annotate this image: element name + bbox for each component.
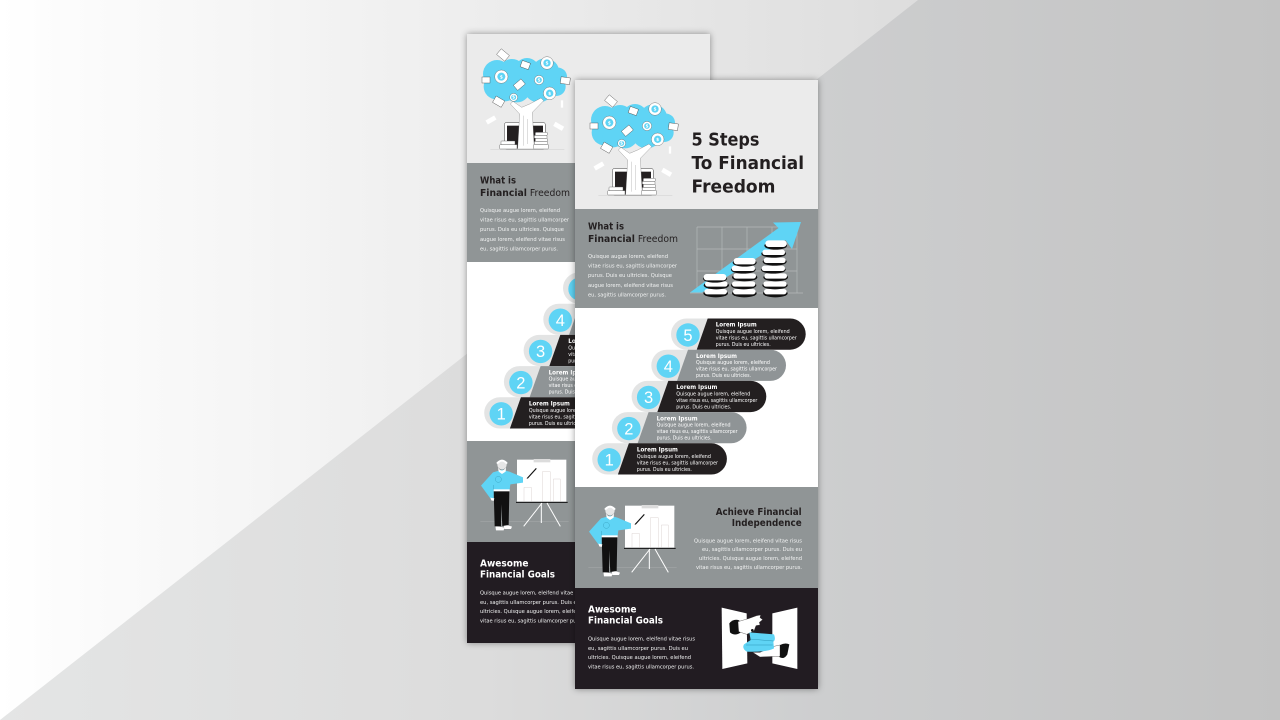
step 1: vitae risus eu, sagittis ullamcorper (637, 460, 719, 466)
icon: hands exchanging money through doors (722, 608, 797, 669)
step 5: vitae risus eu, sagittis ullamcorper (716, 336, 798, 342)
section: achieve financial independence text (694, 507, 802, 571)
icon: money tree: $ (653, 107, 657, 113)
step 3: 3 (644, 389, 653, 407)
step 5 (671, 318, 806, 350)
step 2: 2 (624, 420, 633, 438)
section: achieve financial independence text: Achieve Financial (716, 507, 802, 518)
section: awesome financial goals text: ultricies. Quisque augue lorem, eleifend (588, 655, 691, 661)
step 4: Quisque augue lorem, eleifend (696, 360, 770, 366)
back step 3: 3 (536, 343, 545, 361)
back card: tree illustration: $ (545, 61, 549, 67)
back step 3 (524, 335, 658, 366)
title: 5 Steps (692, 130, 760, 150)
back step 4 (543, 304, 678, 335)
step 4: purus. Duis eu ultricies. (696, 373, 751, 379)
step 3 (632, 381, 766, 412)
back infographic card (467, 34, 710, 643)
section: what is financial freedom text: Financial Freedom (588, 234, 678, 245)
step 3: vitae risus eu, sagittis ullamcorper (676, 398, 758, 404)
back card: tree illustration: $ (548, 91, 551, 97)
section: what is financial freedom text: augue lorem, eleifend vitae risus (588, 283, 673, 289)
back card: tree illustration (482, 49, 570, 150)
section: what is financial freedom text: Quisque augue lorem, eleifend (588, 254, 668, 260)
back step 4: 4 (556, 312, 565, 330)
step 2: purus. Duis eu ultricies. (657, 436, 712, 442)
step 3: Lorem Ipsum (676, 384, 717, 391)
back step 3: Quisque augue lorem, eleifend (568, 345, 642, 351)
step 2: vitae risus eu, sagittis ullamcorper (657, 429, 738, 435)
back card: what is financial freedom text: vitae risus eu, sagittis ullamcorper (480, 218, 570, 224)
section: what is financial freedom text: eu, sagittis ullamcorper purus. (588, 292, 666, 298)
back step 5 (563, 272, 604, 304)
chart: rising arrow and coin stacks (690, 222, 803, 297)
step 1 (592, 443, 727, 474)
step 1: 1 (605, 452, 614, 470)
step 5: 5 (683, 327, 693, 345)
step 1: Lorem Ipsum (637, 447, 678, 454)
section: awesome financial goals text: Awesome (588, 604, 637, 615)
back step 2: purus. Duis eu ultricies. (549, 390, 604, 396)
section: awesome financial goals text: eu, sagittis ullamcorper purus. Duis eu (588, 646, 688, 652)
step 3: Quisque augue lorem, eleifend (676, 391, 750, 397)
back card: awesome financial goals text (480, 558, 587, 624)
icon: money tree: $ (608, 120, 611, 126)
back step 1: Lorem Ipsum (529, 401, 570, 408)
back card: awesome financial goals text: eu, sagittis ullamcorper purus. Duis eu (480, 600, 580, 606)
coin stack small (703, 274, 729, 297)
back step 2: 2 (516, 374, 525, 392)
section: what is financial freedom text: What is (588, 222, 624, 232)
section: achieve financial independence text: ultricies. Quisque augue lorem, eleifend (699, 556, 802, 562)
step 4 (651, 350, 786, 381)
step 4: Lorem Ipsum (696, 353, 737, 360)
section: awesome financial goals text: Financial Goals (588, 616, 663, 627)
back step 3: vitae risus eu, sagittis ullamcorper (568, 352, 650, 358)
step 2: Quisque augue lorem, eleifend (657, 423, 731, 429)
steps ladder (592, 318, 806, 474)
back step 3: purus. Duis eu ultricies. (568, 358, 624, 364)
back step 2 (504, 366, 639, 397)
front card sections (575, 80, 818, 689)
section: what is financial freedom text: vitae risus eu, sagittis ullamcorper (588, 264, 678, 270)
back step 3: Lorem Ipsum (568, 338, 609, 345)
back card sections (467, 34, 710, 643)
coin stack medium (731, 258, 757, 297)
back card: steps ladder (484, 272, 678, 428)
back card: what is financial freedom text: eu, sagittis ullamcorper purus. (480, 246, 558, 252)
back card: what is financial freedom text: augue lorem, eleifend vitae risus (480, 237, 565, 243)
section: awesome financial goals text: Quisque augue lorem, eleifend vitae risus (588, 637, 695, 643)
back card: what is financial freedom text: Quisque augue lorem, eleifend (480, 208, 560, 214)
coin stack tall (761, 240, 788, 297)
title: To Financial (692, 154, 804, 174)
back card: presenter illustration (480, 459, 569, 530)
front infographic card (575, 80, 818, 689)
section: awesome financial goals text: vitae risus eu, sagittis ullamcorper purus. (588, 664, 694, 670)
back card: awesome financial goals text: vitae risus eu, sagittis ullamcorper purus. (480, 618, 586, 624)
back step 1: 1 (497, 406, 506, 424)
section: achieve financial independence text: eu, sagittis ullamcorper purus. Duis eu (702, 547, 802, 553)
back card: what is financial freedom text: What is (480, 176, 516, 186)
back card: awesome financial goals text: ultricies. Quisque augue lorem, eleifend (480, 609, 583, 615)
back step 2: Lorem Ipsum (549, 369, 590, 376)
back step 1 (484, 397, 619, 428)
step 2 (612, 412, 747, 443)
back card: what is financial freedom text: purus. Duis eu ultricies. Quisque (480, 227, 564, 233)
step 5: Lorem Ipsum (716, 322, 757, 329)
step 5: purus. Duis eu ultricies. (716, 342, 771, 348)
back card: awesome financial goals text: Awesome (480, 558, 529, 569)
back card: tree illustration: $ (537, 77, 541, 83)
icon: money tree (590, 95, 678, 196)
section: awesome financial goals text (588, 604, 695, 670)
back step 1: vitae risus eu, sagittis ullamcorper (529, 414, 611, 420)
icon: money tree: $ (620, 141, 623, 147)
back card: tree illustration: $ (500, 74, 503, 80)
section: achieve financial independence text: vitae risus eu, sagittis ullamcorper purus. (696, 565, 802, 571)
section: achieve financial independence text: Independence (732, 518, 802, 529)
back card: awesome financial goals text: Quisque augue lorem, eleifend vitae risus (480, 591, 587, 597)
step 4: vitae risus eu, sagittis ullamcorper (696, 367, 778, 373)
back step 2: vitae risus eu, sagittis ullamcorper (549, 383, 630, 389)
step 2: Lorem Ipsum (657, 415, 698, 422)
title: Freedom (692, 178, 776, 198)
icon: money tree: $ (656, 137, 659, 143)
back step 1: purus. Duis eu ultricies. (529, 421, 584, 427)
back card: awesome financial goals text: Financial Goals (480, 570, 555, 581)
icon: money tree: $ (645, 123, 649, 129)
back step 2: Quisque augue lorem, eleifend (549, 377, 623, 383)
section: achieve financial independence text: Quisque augue lorem, eleifend vitae risus (694, 538, 802, 544)
back card: what is financial freedom text (480, 176, 570, 252)
section: what is financial freedom text (588, 222, 678, 298)
title (692, 130, 804, 198)
step 4: 4 (664, 358, 673, 376)
step 5: Quisque augue lorem, eleifend (716, 329, 790, 335)
step 1: Quisque augue lorem, eleifend (637, 454, 711, 460)
back card: what is financial freedom text: Financial Freedom (480, 188, 570, 199)
section: what is financial freedom text: purus. Duis eu ultricies. Quisque (588, 273, 672, 279)
step 1: purus. Duis eu ultricies. (637, 467, 692, 473)
back card: tree illustration: $ (512, 95, 515, 101)
back step 1: Quisque augue lorem, eleifend (529, 408, 603, 414)
icon: presenter at whiteboard (588, 505, 677, 576)
step 3: purus. Duis eu ultricies. (676, 404, 732, 410)
